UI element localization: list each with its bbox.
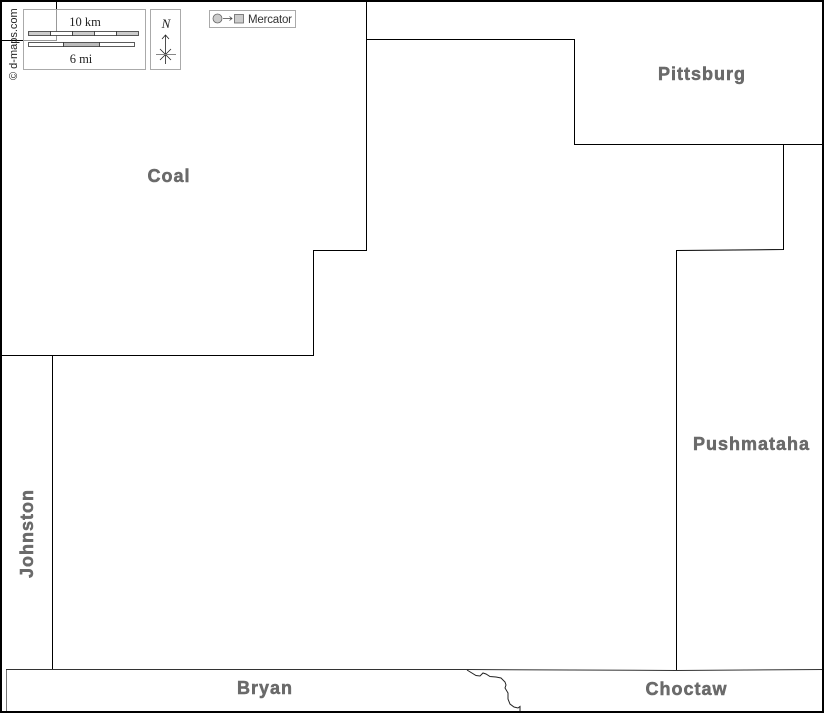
river boundary bbox=[467, 670, 520, 712]
county label: Pushmataha: Pushmataha bbox=[693, 434, 810, 454]
county label: Coal: Coal bbox=[147, 166, 191, 186]
scale bar bbox=[0, 0, 146, 70]
county label: Choctaw: Choctaw bbox=[645, 679, 728, 699]
north arrow compass bbox=[150, 10, 180, 70]
county label: Johnston: Johnston bbox=[17, 489, 37, 578]
county label: Pittsburg: Pittsburg bbox=[658, 64, 746, 84]
scale bar: 10 km bbox=[69, 15, 101, 29]
credit text: © d-maps.com bbox=[8, 8, 20, 80]
north arrow compass: N bbox=[161, 16, 172, 31]
scale bar: 6 mi bbox=[70, 52, 93, 66]
projection legend: Mercator bbox=[248, 14, 292, 26]
county label: Bryan: Bryan bbox=[237, 678, 293, 698]
projection legend bbox=[210, 10, 296, 28]
